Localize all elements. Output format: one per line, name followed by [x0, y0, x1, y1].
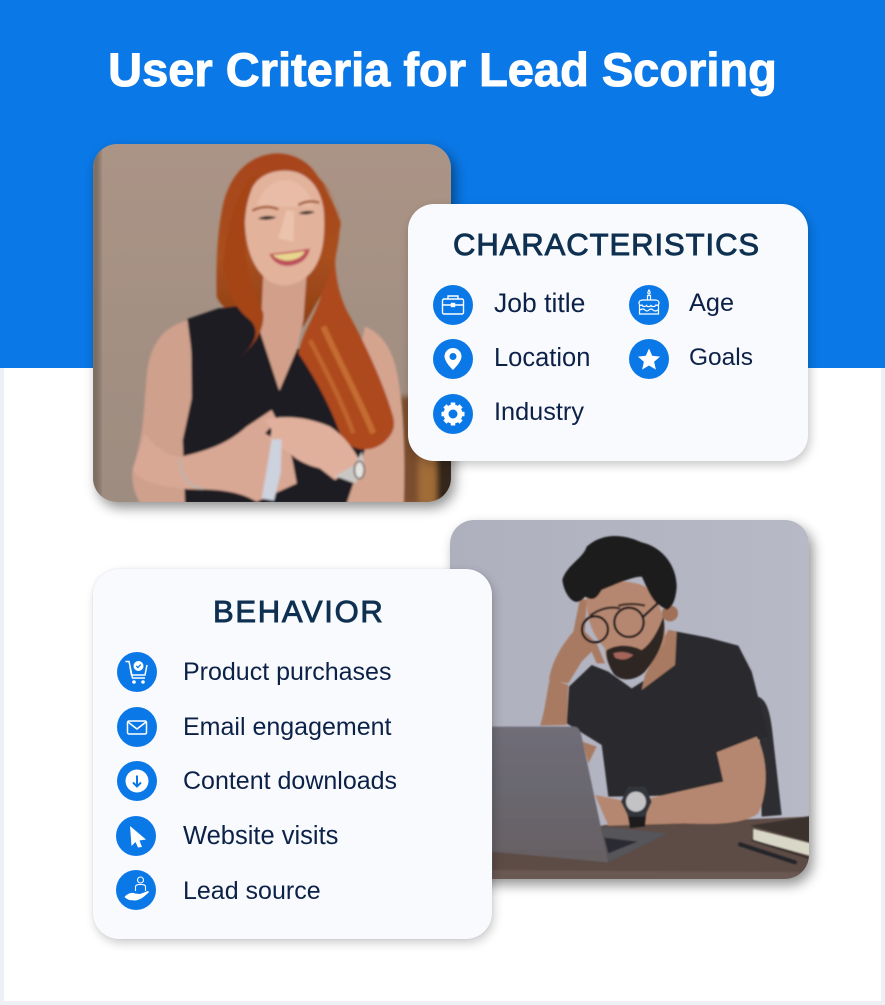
- blue header band: [0, 0, 885, 368]
- icon: map pin: [433, 339, 473, 379]
- panel: characteristics: [408, 204, 808, 461]
- item: lead source: [116, 870, 321, 910]
- bracelet: [180, 458, 203, 489]
- beard: [606, 617, 664, 679]
- brows and eyes: [252, 207, 278, 211]
- hair behind: [216, 153, 341, 327]
- item: content downloads: [117, 761, 397, 801]
- icon: envelope: [117, 707, 157, 747]
- label: website visits: Website visits: [183, 822, 338, 850]
- hair: [562, 536, 677, 610]
- neck: [642, 630, 677, 690]
- heading: characteristics: CHARACTERISTICS: [453, 227, 760, 262]
- photo: smiling woman: [93, 144, 451, 502]
- right hand: [265, 417, 361, 480]
- label: product purchases: Product purchases: [183, 658, 391, 686]
- label: job title: Job title: [494, 288, 585, 318]
- dress: [183, 305, 368, 503]
- arms: [132, 320, 203, 503]
- mouth: [269, 249, 310, 266]
- item: website visits: [116, 816, 338, 856]
- label: content downloads: Content downloads: [183, 767, 397, 795]
- left forearm and hand: [133, 410, 297, 502]
- table: [492, 817, 810, 880]
- icon: download: [117, 761, 157, 801]
- laptop lid: [492, 727, 608, 862]
- neck and chest: [261, 273, 307, 391]
- icon: birthday cake: [629, 285, 669, 325]
- chair: [758, 697, 782, 817]
- pen: [740, 844, 795, 862]
- item: email engagement: [117, 707, 392, 747]
- item: location: [433, 339, 590, 379]
- face: [586, 582, 665, 678]
- icon: shopping cart: [117, 652, 157, 692]
- label: industry: Industry: [494, 398, 584, 426]
- icon: hand holding person: [116, 870, 156, 910]
- laptop base: [602, 827, 668, 862]
- item: goals: [629, 339, 753, 379]
- label: age: Age: [689, 289, 734, 317]
- icon: cursor: [116, 816, 156, 856]
- face: [245, 171, 324, 285]
- item: job title: [433, 285, 585, 325]
- shirt: [567, 630, 768, 797]
- hair front left: [223, 175, 263, 357]
- title: User Criteria for Lead Scoring: [108, 43, 777, 96]
- hair front right: [298, 168, 394, 449]
- label: goals: Goals: [689, 344, 753, 371]
- photo: man at laptop: [450, 520, 809, 879]
- label: email engagement: Email engagement: [183, 713, 391, 741]
- glasses: [582, 616, 608, 642]
- white object: [262, 439, 282, 501]
- label: location: Location: [494, 344, 590, 372]
- item: age: [629, 285, 734, 325]
- icon: briefcase: [433, 285, 473, 325]
- watch: [627, 810, 647, 828]
- heading: behavior: BEHAVIOR: [213, 594, 385, 629]
- icon: star: [629, 339, 669, 379]
- item: industry: [433, 394, 584, 434]
- forearm: [595, 737, 766, 826]
- item: product purchases: [117, 652, 391, 692]
- arm on head: [540, 678, 568, 726]
- label: lead source: Lead source: [183, 877, 321, 905]
- panel: behavior: [93, 569, 492, 939]
- icon: gear: [433, 394, 473, 434]
- book: [750, 816, 810, 842]
- watch: [335, 452, 365, 483]
